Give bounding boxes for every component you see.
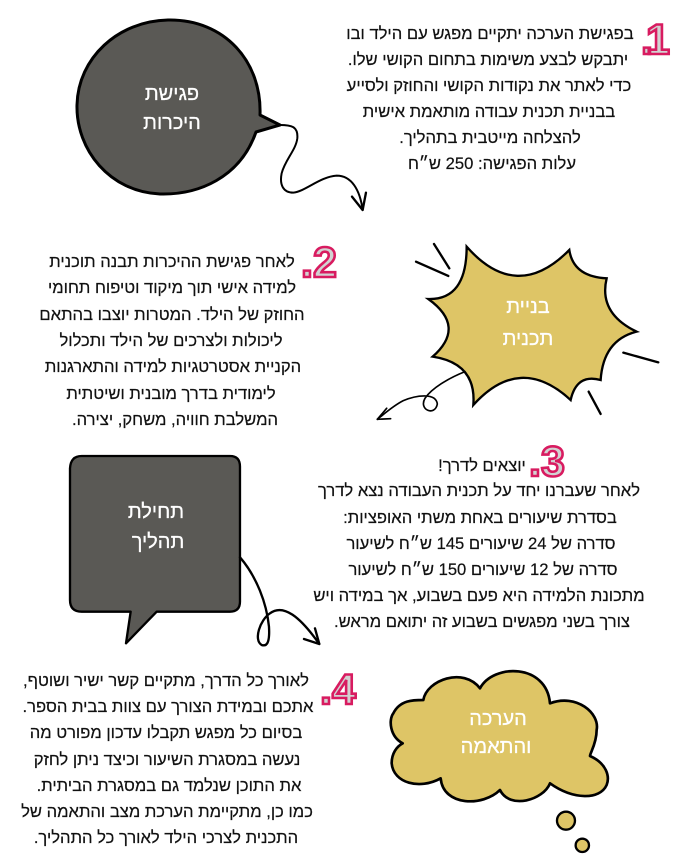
heading: first meeting: פגישת [145, 83, 199, 105]
panel: step 4 thought cloud [391, 671, 608, 852]
text: step 3 description: צורך בשני מפגשים בשבוע זה יתואם מראש. [334, 612, 630, 631]
text: step 4 description: נעשה במסגרת השיעור וכיצד ניתן לחזק [34, 750, 300, 769]
text: step 4 description [21, 671, 314, 847]
heading: building a plan: תכנית [503, 328, 553, 350]
text: step 1 description: יתבקש לבצע משימות בתחום הקושי שלו. [348, 50, 628, 69]
text: step 3 description: סדרה של 24 שיעורים 145 ש״ח לשיעור [346, 534, 616, 553]
text: step 2 description: לימודית בדרך מובנית ושיטתית [66, 384, 276, 403]
text: step 2 description: החוזק של הילד. המטרות יוצבו בהתאם [39, 305, 305, 324]
heading: evaluation and adaptation [461, 708, 531, 758]
text: step 1 description: בבניית תכנית עבודה מותאמת אישית [363, 102, 615, 121]
number: 2: .2 [301, 239, 337, 287]
text: step 2 description: לאחר פגישת ההיכרות תבנה תוכנית [49, 252, 295, 271]
text: step 4 description: התכנית לצרכי הילד לאורך כל התהליך. [34, 828, 298, 847]
text: step 3 description: יוצאים לדרך! [438, 456, 526, 475]
text: step 1 description: עלות הפגישה: 250 ש״ח [408, 154, 576, 173]
text: step 2 description [39, 252, 305, 429]
heading: evaluation and adaptation: הערכה [469, 708, 527, 730]
text: step 1 description: כדי לאתר את נקודות הקושי והחוזק ולסייע [347, 76, 631, 95]
text: step 1 description [346, 24, 634, 173]
text: step 4 description: את התוכן שנלמד גם במסגרת הביתית. [37, 776, 302, 795]
number: 1: .1 [641, 16, 669, 64]
burst accent lines [416, 244, 658, 414]
heading: first meeting: היכרות [143, 112, 201, 134]
text: step 3 description [313, 456, 645, 631]
panel: step 2 burst [416, 244, 658, 414]
panel: step 3 speech box [70, 456, 240, 643]
text: step 4 description: בסיום כל מפגש תקבלו עדכון מפורט מה [30, 723, 302, 742]
text: step 3 description: מתכונת הלמידה היא פעם בשבוע, אך במידה ויש [313, 586, 645, 605]
panel: step 1 speech bubble [77, 20, 280, 194]
heading: evaluation and adaptation: והתאמה [461, 736, 531, 758]
text: step 1 description: להצלחה מייטבית בתהליך. [399, 128, 581, 147]
text: step 4 description: אתכם ובמידת הצורך עם צוות בבית הספר. [23, 697, 314, 716]
heading: start of process: תהליך [132, 531, 184, 553]
heading: building a plan: בניית [506, 296, 550, 318]
text: step 4 description: כמו כן, מתקיימת הערכת מצב והתאמה של [21, 802, 313, 821]
text: step 4 description: לאורך כל הדרך, מתקיים קשר ישיר ושוטף, [23, 671, 309, 690]
heading: start of process: תחילת [128, 501, 184, 523]
heading: building a plan [503, 296, 553, 350]
thought bubbles [557, 812, 589, 852]
text: step 3 description: בסדרת שיעורים באחת משתי האופציות: [343, 508, 617, 527]
text: step 2 description: הקניית אסטרטגיות למידה והתארגנות [45, 357, 301, 376]
arrow: step 1 to step 2 [280, 125, 366, 210]
heading: first meeting [143, 83, 201, 134]
number: 3: .3 [529, 438, 565, 486]
number: 4: .4 [320, 666, 356, 714]
text: step 2 description: המשלבת חוויה, משחק, יצירה. [72, 410, 278, 429]
text: step 3 description: סדרה של 12 שיעורים 150 ש״ח לשיעור [348, 560, 618, 579]
text: step 2 description: ליכולות ולצרכים של הילד ותכלול [59, 331, 283, 350]
heading: start of process [128, 501, 184, 553]
arrow: step 2 to step 3 [377, 372, 465, 419]
text: step 1 description: בפגישת הערכה יתקיים מפגש עם הילד ובו [346, 24, 634, 43]
text: step 3 description: לאחר שעברנו יחד על תכנית העבודה נצא לדרך [318, 481, 640, 500]
arrow: step 3 to step 4 [240, 557, 319, 645]
text: step 2 description: למידה אישי תוך מיקוד וטיפוח תחומי [48, 278, 296, 297]
